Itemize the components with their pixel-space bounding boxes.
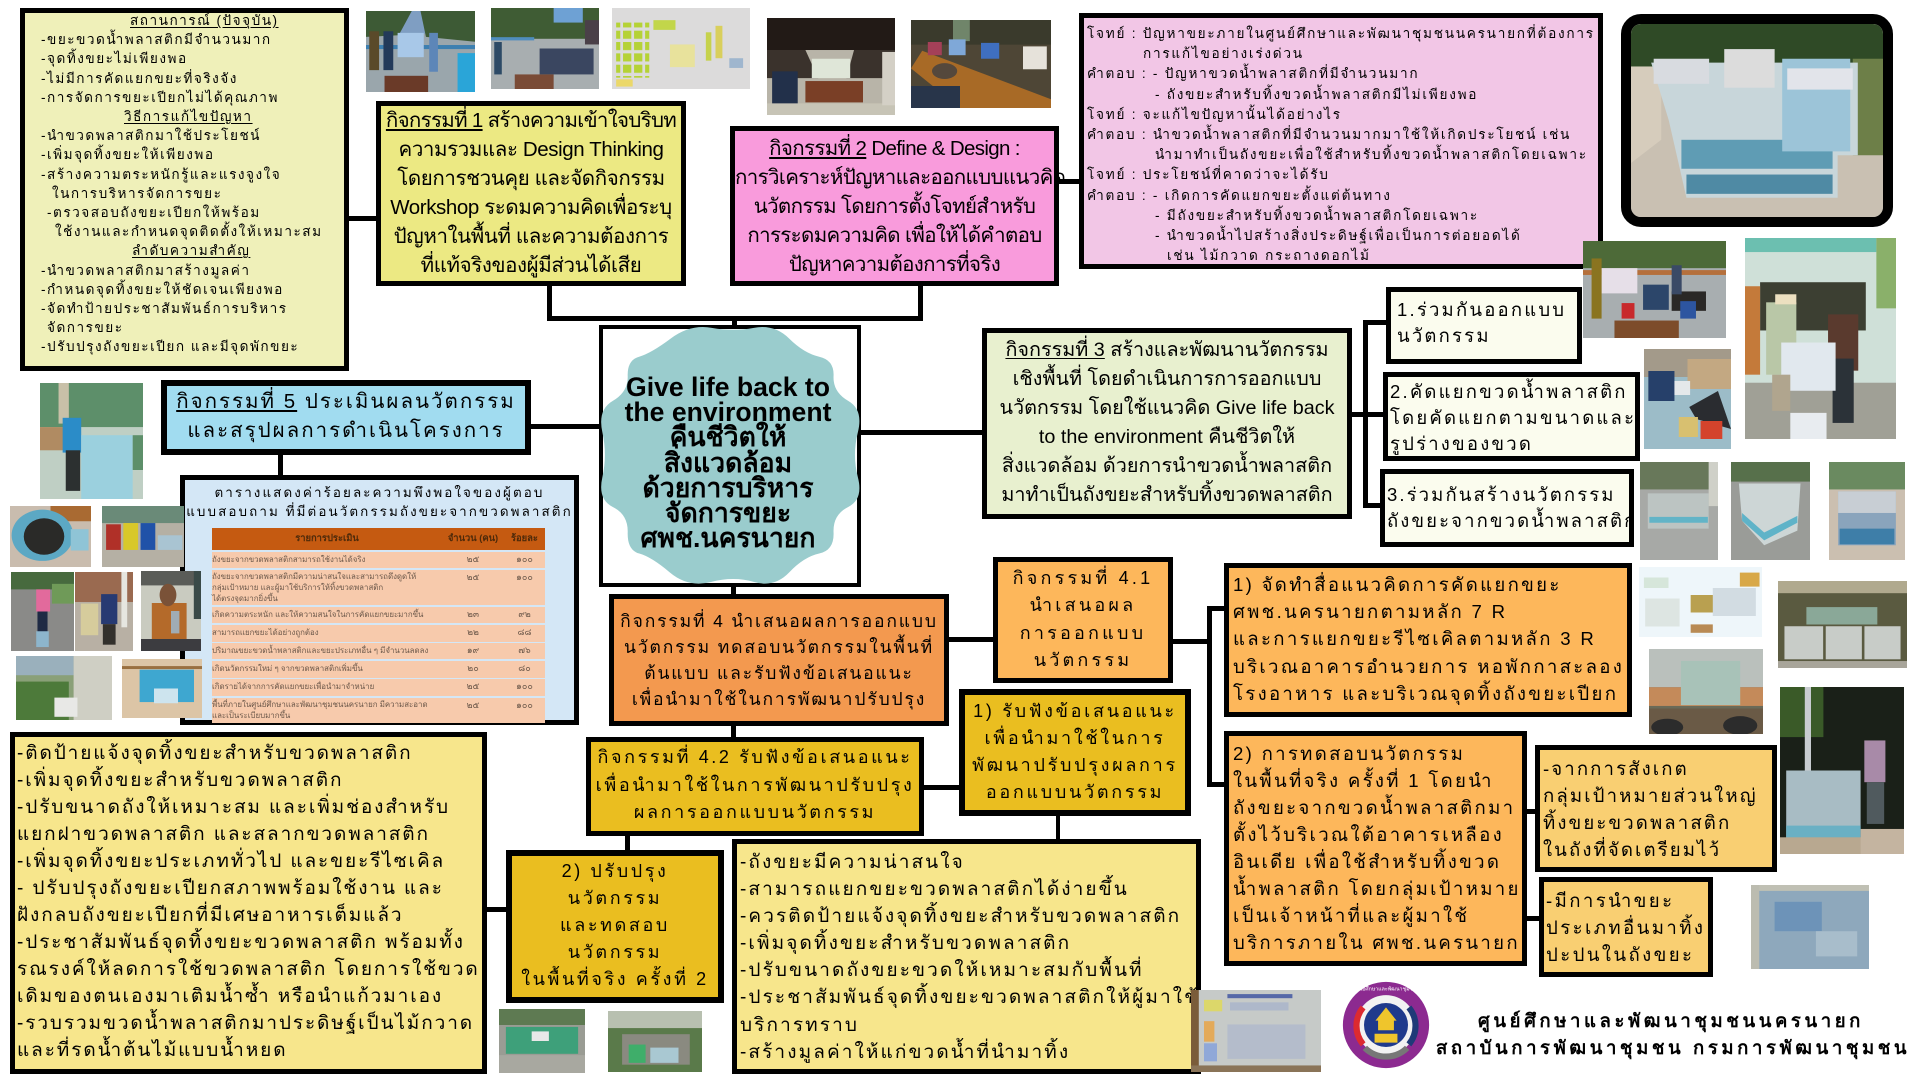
panel: situation, solutions and priorities: -ตรวจสอบถังขยะเปียกให้พร้อม xyxy=(47,205,261,220)
table row 4: ๒๒ xyxy=(467,627,479,637)
panel: listen to suggestions: เพื่อนำมาใช้ในการ xyxy=(984,728,1166,748)
panel: improve and test round 2: นวัตกรรม xyxy=(568,888,662,908)
panel: activity 2: ปัญหาความต้องการที่จริง xyxy=(789,253,1000,276)
panel: activity 3: to the environment คืนชีวิตให้ xyxy=(1039,426,1295,448)
table row 7: ๒๕ xyxy=(467,681,479,691)
footer: organisation name: ศูนย์ศึกษาและพัฒนาชุมชนนครนายก xyxy=(1478,1010,1864,1031)
step 1 of activity 3: 1.ร่วมกันออกแบบ xyxy=(1397,299,1566,320)
center title text: ด้วยการบริหาร xyxy=(642,473,814,503)
table row 3 xyxy=(212,607,545,623)
panel: improve and test round 2: ในพื้นที่จริง ครั้งที่ 2 xyxy=(521,969,709,989)
panel: activity 4 xyxy=(609,594,949,726)
photo: woman beside water dispenser xyxy=(75,572,133,651)
panel: 7R and 3R media: 1) จัดทำสื่อแนวคิดการคัดแยกขยะ xyxy=(1233,574,1562,595)
panel: situation, solutions and priorities: -ไม่มีการคัดแยกขยะที่จริงจัง xyxy=(41,71,238,86)
panel: improvements list: -ติดป้ายแจ้งจุดทิ้งขยะสำหรับขวดพลาสติก xyxy=(17,743,413,764)
panel: improve and test round 2 xyxy=(506,850,724,1003)
panel: design questions and answers: โจทย์ : ประโยชน์ที่คาดว่าจะได้รับ xyxy=(1087,167,1330,182)
table row 1: ๑๐๐ xyxy=(516,554,533,564)
panel: activity 2: นวัตกรรม โดยการตั้งโจทย์สำหรับ xyxy=(754,195,1035,218)
panel: observation 1: ทิ้งขยะขวดพลาสติก xyxy=(1543,812,1731,833)
panel: activity 3 xyxy=(982,328,1352,519)
panel: situation, solutions and priorities: สถานการณ์ (ปัจจุบัน) xyxy=(130,13,279,28)
photo: man with bottle bin xyxy=(40,383,143,499)
panel: satisfaction table xyxy=(180,475,579,725)
step 3 of activity 3 xyxy=(1380,469,1634,547)
step 2 of activity 3: รูปร่างของขวด xyxy=(1390,433,1533,454)
panel: improvements list: -เพิ่มจุดทิ้งขยะสำหรับขวดพลาสติก xyxy=(17,770,343,791)
panel: activity 4: เพื่อนำมาใช้ในการพัฒนาปรับปรุง xyxy=(632,689,926,709)
panel: improve and test round 2: นวัตกรรม xyxy=(568,942,662,962)
panel: design questions and answers: คำตอบ : - เกิดการคัดแยกขยะตั้งแต่ต้นทาง xyxy=(1087,188,1392,203)
table row 5: ๗๖ xyxy=(518,645,531,655)
panel: activity 3: มาทำเป็นถังขยะสำหรับทิ้งขวดพลาสติก xyxy=(1001,484,1333,506)
table row 2: ๑๐๐ xyxy=(516,572,533,582)
panel: design questions and answers: โจทย์ : จะแก้ไขปัญหานั้นได้อย่างไร xyxy=(1087,107,1342,122)
panel: situation, solutions and priorities: -กำหนดจุดทิ้งขยะให้ชัดเจนเพียงพอ xyxy=(41,282,284,297)
panel: situation, solutions and priorities xyxy=(20,8,349,371)
panel: improvements list: -ปรับขนาดถังให้เหมาะสม และเพิ่มช่องสำหรับ xyxy=(17,797,450,818)
photo: people around wooden table xyxy=(911,20,1051,108)
table row 8: ๑๐๐ xyxy=(516,700,533,710)
panel: activity 4: นวัตกรรม ทดสอบนวัตกรรมในพื้นที่ xyxy=(624,637,934,657)
panel: field test round 1: บริการภายใน ศพช.นครนายก xyxy=(1233,932,1520,953)
table row 6 xyxy=(212,661,545,678)
table row 7: เกิดรายได้จากการคัดแยกขยะเพื่อนำมาจำหน่าย xyxy=(212,682,374,691)
panel: activity 3: นวัตกรรม โดยใช้แนวคิด Give life back xyxy=(999,397,1335,419)
photo: bottle bin frame 1 xyxy=(1640,462,1718,560)
panel: situation, solutions and priorities: วิธีการแก้ไขปัญหา xyxy=(124,109,253,124)
panel: activity 4.1: การออกแบบ xyxy=(1020,623,1146,643)
panel: activity 4.1: กิจกรรมที่ 4.1 xyxy=(1013,568,1153,588)
photo: sticky notes on board xyxy=(612,8,750,89)
table row 5: ๑๙ xyxy=(467,645,479,655)
panel: situation, solutions and priorities: -นำขวดพลาสติกมาใช้ประโยชน์ xyxy=(41,128,261,143)
panel: 7R and 3R media: และการแยกขยะรีไซเคิลตามหลัก 3 R xyxy=(1233,628,1596,649)
panel: listen to suggestions: ออกแบบนวัตกรรม xyxy=(986,782,1164,802)
panel: design questions and answers: - ถังขยะสำหรับทิ้งขวดน้ำพลาสติกมีไม่เพียงพอ xyxy=(1155,87,1478,102)
panel: improvements list: - ปรับปรุงถังขยะเปียกสภาพพร้อมใช้งาน และ xyxy=(17,878,444,899)
panel: feedback list: -สามารถแยกขยะขวดพลาสติกได้ง่ายขึ้น xyxy=(740,879,1129,900)
panel: field test round 1: ตั้งไว้บริเวณใต้อาคารเหลือง xyxy=(1233,824,1504,845)
panel: activity 3: สิ่งแวดล้อม ด้วยการนำขวดน้ำพลาสติก xyxy=(1002,455,1332,477)
photo: infographic poster xyxy=(1639,567,1762,637)
panel: activity 4.1: นวัตกรรม xyxy=(1034,650,1132,670)
panel: design questions and answers: นำมาทำเป็นถังขยะเพื่อใช้สำหรับทิ้งขวดน้ำพลาสติกโดยเฉพาะ xyxy=(1155,147,1588,162)
step 2 of activity 3: โดยคัดแยกตามขนาดและ xyxy=(1390,407,1636,428)
panel: 7R and 3R media: โรงอาหาร และบริเวณจุดทิ้งถังขยะเปียก xyxy=(1233,683,1618,704)
table row 3: ๙๒ xyxy=(518,609,531,619)
step 1 of activity 3: นวัตกรรม xyxy=(1397,325,1491,346)
photo: presentation outdoors xyxy=(366,11,475,92)
table row 1: ถังขยะจากขวดพลาสติกสามารถใช้งานได้จริง xyxy=(212,555,365,564)
photo: bottle planter xyxy=(10,506,91,567)
panel: improvements list: ฝังกลบถังขยะเปียกที่มีเศษอาหารเต็มแล้ว xyxy=(17,905,403,926)
table row 8 xyxy=(212,698,545,723)
logo: community development center seal: ศูนย์ศึกษาและพัฒนาชุมชน xyxy=(1355,986,1417,993)
panel: 7R and 3R media xyxy=(1224,563,1632,717)
panel: design questions and answers: คำตอบ : นำขวดน้ำพลาสติกที่มีจำนวนมากมาใช้ให้เกิดประโยชน์ เช่น xyxy=(1087,127,1571,142)
panel: feedback list xyxy=(732,839,1201,1074)
table row 8: และเป็นระเบียบมากขึ้น xyxy=(212,711,290,720)
panel: observation 2: -มีการนำขยะ xyxy=(1546,890,1674,911)
panel: situation, solutions and priorities: จัดการขยะ xyxy=(47,320,124,335)
panel: listen to suggestions: พัฒนาปรับปรุงผลการ xyxy=(972,755,1178,775)
panel: feedback list: -ประชาสัมพันธ์จุดทิ้งขยะขวดพลาสติกให้ผู้มาใช้ xyxy=(740,987,1199,1008)
photo: coloured waste bins xyxy=(102,506,184,567)
panel: activity 1: ปัญหาในพื้นที่ และความต้องการ xyxy=(394,225,668,248)
table row 2: ได้ตรงจุดมากยิ่งขึ้น xyxy=(212,594,278,603)
table row 8: พื้นที่ภายในศูนย์ศึกษาและพัฒนาชุมชนนครนายก มีความสะอาด xyxy=(212,700,428,709)
panel: improvements list: -เพิ่มจุดทิ้งขยะประเภททั่วไป และขยะรีไซเคิล xyxy=(17,851,445,872)
step 3 of activity 3: ถังขยะจากขวดน้ำพลาสติก xyxy=(1387,510,1637,531)
step 2 of activity 3: 2.คัดแยกขวดน้ำพลาสติก xyxy=(1390,381,1628,402)
center title text: Give life back to xyxy=(626,372,830,402)
table header xyxy=(212,528,545,550)
step 1 of activity 3 xyxy=(1386,287,1582,364)
panel: observation 1: -จากการสังเกต xyxy=(1543,758,1689,779)
photo: notice board shelter xyxy=(1778,581,1907,668)
table row 1: ๒๕ xyxy=(467,554,479,564)
photo: man with bin at night xyxy=(1780,687,1904,854)
center scalloped shape xyxy=(601,327,860,584)
photo: feedback chart paper xyxy=(1191,990,1321,1072)
table row 8: ๒๕ xyxy=(467,700,479,710)
photo: green bin outdoors xyxy=(499,1009,585,1073)
panel: improve and test round 2: และทดสอบ xyxy=(560,915,670,935)
table row 5: ปริมาณขยะขวดน้ำพลาสติกและขยะประเภทอื่น ๆ มีจำนวนลดลง xyxy=(212,646,428,655)
table row 3: เกิดความตระหนัก และให้ความสนใจในการคัดแยกขยะมากขึ้น xyxy=(212,610,423,619)
table row 6: เกิดนวัตกรรมใหม่ ๆ จากขวดพลาสติกเพิ่มขึ้น xyxy=(212,664,363,673)
panel: situation, solutions and priorities: ลำดับความสำคัญ xyxy=(132,243,250,258)
panel: activity 1 xyxy=(376,101,686,286)
center title text xyxy=(624,372,832,553)
table row 2 xyxy=(212,570,545,605)
center title text: ศพช.นครนายก xyxy=(641,523,815,553)
panel: field test round 1: เป็นเจ้าหน้าที่และผู้มาใช้ xyxy=(1233,905,1469,926)
panel: feedback list: บริการทราบ xyxy=(740,1015,859,1036)
panel: listen to suggestions: 1) รับฟังข้อเสนอแนะ xyxy=(973,701,1177,721)
panel: feedback list: -สร้างมูลค่าให้แก่ขวดน้ำที่นำมาทิ้ง xyxy=(740,1042,1070,1063)
table header: รายการประเมิน xyxy=(295,532,359,543)
panel: activity 4.1: นำเสนอผล xyxy=(1030,595,1136,615)
panel: 7R and 3R media: ศพช.นครนายกตามหลัก 7 R xyxy=(1233,601,1507,622)
panel: activity 1: ที่แท้จริงของผู้มีส่วนได้เสีย xyxy=(421,254,641,277)
table row 7: ๑๐๐ xyxy=(516,681,533,691)
photo: woman with bottle broom xyxy=(11,572,74,651)
panel: feedback list: -เพิ่มจุดทิ้งขยะสำหรับขวดพลาสติก xyxy=(740,933,1071,954)
panel: improvements list: เดิมของตนเองมาเติมน้ำซ้ำ หรือนำแก้วมาเอง xyxy=(17,986,443,1007)
panel: design questions and answers: คำตอบ : - ปัญหาขวดน้ำพลาสติกที่มีจำนวนมาก xyxy=(1087,66,1419,81)
panel: activity 5: กิจกรรมที่ 5 ประเมินผลนวัตกรรม xyxy=(176,390,516,413)
panel: situation, solutions and priorities: -จัดทำป้ายประชาสัมพันธ์การบริหาร xyxy=(41,301,288,316)
center title text: the environment xyxy=(625,397,831,427)
panel: design questions and answers xyxy=(1079,13,1603,269)
footer: organisation name xyxy=(1436,1010,1910,1060)
panel: improvements list: แยกฝาขวดพลาสติก และสลากขวดพลาสติก xyxy=(17,824,430,845)
table row 4 xyxy=(212,625,545,642)
table title: แบบสอบถาม ที่มีต่อนวัตกรรมถังขยะจากขวดพลาสติก xyxy=(186,504,573,518)
photo: plastic bottle bin in black rounded frame xyxy=(1621,14,1893,227)
photo: poster on bottles xyxy=(122,659,202,718)
photo: bottle bin with green surroundings xyxy=(608,1011,702,1072)
panel: improvements list: และที่รดน้ำต้นไม้แบบน้ำหยด xyxy=(17,1040,287,1061)
panel: situation, solutions and priorities: -ปรับปรุงถังขยะเปียก และมีจุดพักขยะ xyxy=(41,339,299,354)
table row 1 xyxy=(212,552,545,568)
panel: activity 5: และสรุปผลการดำเนินโครงการ xyxy=(187,418,505,442)
photo: bottles in bin xyxy=(1751,885,1869,969)
panel: activity 3: กิจกรรมที่ 3 สร้างและพัฒนานวัตกรรม xyxy=(1005,339,1329,361)
panel: improvements list: -ประชาสัมพันธ์จุดทิ้งขยะขวดพลาสติก พร้อมทั้ง xyxy=(17,932,465,953)
panel: observation 2: ประเภทอื่นมาทิ้ง xyxy=(1546,917,1705,938)
panel: activity 1: โดยการชวนคุย และจัดกิจกรรม xyxy=(397,167,665,190)
panel: design questions and answers: - มีถังขยะสำหรับทิ้งขวดน้ำพลาสติกโดยเฉพาะ xyxy=(1155,208,1479,223)
photo: man holding bottle xyxy=(141,571,201,651)
panel: field test round 1: น้ำพลาสติก โดยกลุ่มเป้าหมาย xyxy=(1233,878,1521,899)
table row 4: ๘๘ xyxy=(518,627,531,637)
panel: field test round 1: 2) การทดสอบนวัตกรรม xyxy=(1233,743,1465,764)
panel: activity 4: ต้นแบบ และรับฟังข้อเสนอแนะ xyxy=(644,663,914,683)
panel: situation, solutions and priorities: -นำขวดพลาสติกมาสร้างมูลค่า xyxy=(41,263,250,278)
table row 3: ๒๓ xyxy=(467,609,479,619)
photo: group seated outdoors xyxy=(491,8,599,89)
panel: activity 2 xyxy=(730,126,1059,286)
panel: situation, solutions and priorities: -เพิ่มจุดทิ้งขยะให้เพียงพอ xyxy=(41,147,214,162)
panel: activity 4.2: กิจกรรมที่ 4.2 รับฟังข้อเสนอแนะ xyxy=(597,747,912,767)
panel: improve and test round 2: 2) ปรับปรุง xyxy=(562,861,668,881)
photo: sorting bottles xyxy=(1644,349,1731,449)
panel: feedback list: -ควรติดป้ายแจ้งจุดทิ้งขยะสำหรับขวดพลาสติก xyxy=(740,906,1181,927)
table title xyxy=(186,485,573,518)
panel: activity 4.1 xyxy=(993,557,1173,683)
photo: meeting under building xyxy=(767,18,895,115)
panel: observation 1: ในถังที่จัดเตรียมไว้ xyxy=(1543,839,1721,860)
table row 4: สามารถแยกขยะได้อย่างถูกต้อง xyxy=(212,628,319,637)
panel: field test round 1: อินเดีย เพื่อใช้สำหรับทิ้งขวด xyxy=(1233,851,1501,872)
panel: observation 1: กลุ่มเป้าหมายส่วนใหญ่ xyxy=(1543,785,1758,806)
table row 2: ๒๕ xyxy=(467,572,479,582)
panel: feedback list: -ถังขยะมีความน่าสนใจ xyxy=(740,852,965,873)
panel: situation, solutions and priorities: -สร้างความตระหนักรู้และแรงจูงใจ xyxy=(41,167,281,182)
step 3 of activity 3: 3.ร่วมกันสร้างนวัตกรรม xyxy=(1387,484,1616,505)
panel: situation, solutions and priorities: -ขยะขวดน้ำพลาสติกมีจำนวนมาก xyxy=(41,32,272,47)
table header: ร้อยละ xyxy=(511,532,538,543)
photo: bottle bin frame 2 xyxy=(1731,462,1810,560)
panel: activity 2: กิจกรรมที่ 2 Define & Design : xyxy=(769,137,1020,160)
panel: design questions and answers: เช่น ไม้กวาด กระถางดอกไม้ xyxy=(1167,248,1371,263)
table row 7 xyxy=(212,679,545,696)
table row 2: กลุ่มเป้าหมาย และผู้มาใช้บริการให้ทิ้งขวดพลาสติก xyxy=(212,583,383,592)
table title: ตารางแสดงค่าร้อยละความพึงพอใจของผู้ตอบ xyxy=(214,485,545,500)
center title text: จัดการขยะ xyxy=(665,498,791,528)
center panel: project title xyxy=(599,325,861,587)
table row 2: ถังขยะจากขวดพลาสติกมีความน่าสนใจและสามารถดึงดูดให้ xyxy=(212,572,416,581)
panel: activity 1: ความรวมและ Design Thinking xyxy=(398,138,664,161)
footer: organisation name: สถาบันการพัฒนาชุมชน กรมการพัฒนาชุมชน xyxy=(1436,1037,1910,1058)
panel: design questions and answers: การแก้ไขอย่างเร่งด่วน xyxy=(1143,46,1304,61)
panel: improvements list xyxy=(10,732,487,1074)
photo: bottle bin frame 3 xyxy=(1829,462,1905,560)
panel: activity 1: Workshop ระดมความคิดเพื่อระบุ xyxy=(390,196,672,219)
center title text: คืนชีวิตให้ xyxy=(670,422,786,452)
panel: 7R and 3R media: บริเวณอาคารอำนวยการ หอพักกาสะลอง xyxy=(1233,656,1624,677)
table row 6: ๘๐ xyxy=(518,663,531,673)
panel: situation, solutions and priorities: ใช้งานและกำหนดจุดติดตั้งให้เหมาะสม xyxy=(55,224,323,239)
panel: design questions and answers: โจทย์ : ปัญหาขยะภายในศูนย์ศึกษาและพัฒนาชุมชนนครนายกที่ต้องการ xyxy=(1087,26,1595,41)
panel: activity 5 xyxy=(161,380,531,455)
panel: observation 1 xyxy=(1535,745,1777,872)
panel: activity 4.2 xyxy=(586,737,924,836)
panel: situation, solutions and priorities: -การจัดการขยะเปียกไม่ได้คุณภาพ xyxy=(41,90,279,105)
table row 6: ๒๐ xyxy=(467,663,479,673)
logo: community development center seal xyxy=(1342,982,1430,1068)
panel: activity 1: กิจกรรมที่ 1 สร้างความเข้าใจบริบท xyxy=(386,109,676,132)
panel: field test round 1: ถังขยะจากขวดน้ำพลาสติกมา xyxy=(1233,797,1515,818)
table row 5 xyxy=(212,643,545,659)
panel: situation, solutions and priorities: -จุดทิ้งขยะไม่เพียงพอ xyxy=(41,51,188,66)
panel: improvements list: -รวบรวมขวดน้ำพลาสติกมาประดิษฐ์เป็นไม้กวาด xyxy=(17,1013,474,1034)
panel: activity 2: การระดมความคิด เพื่อให้ได้คำตอบ xyxy=(747,224,1042,247)
panel: observation 2 xyxy=(1539,877,1713,977)
panel: activity 4.2: เพื่อนำมาใช้ในการพัฒนาปรับปรุง xyxy=(596,774,914,794)
photo: sign with wet bins xyxy=(1649,649,1763,734)
panel: field test round 1 xyxy=(1224,731,1527,966)
center title text: สิ่งแวดล้อม xyxy=(664,448,792,478)
panel: activity 4.2: ผลการออกแบบนวัตกรรม xyxy=(634,802,876,822)
photo: team designing innovation xyxy=(1583,241,1726,338)
panel: field test round 1: ในพื้นที่จริง ครั้งที่ 1 โดยนำ xyxy=(1233,770,1494,791)
table header: จำนวน (คน) xyxy=(448,532,498,543)
photo: planter from bottle xyxy=(16,656,112,720)
panel: feedback list: -ปรับขนาดถังขยะขวดให้เหมาะสมกับพื้นที่ xyxy=(740,960,1144,981)
panel: observation 2: ปะปนในถังขยะ xyxy=(1546,944,1694,965)
panel: activity 2: การวิเคราะห์ปัญหาและออกแบบแนวคิด xyxy=(735,166,1065,189)
panel: situation, solutions and priorities: ในการบริหารจัดการขยะ xyxy=(52,186,222,201)
panel: activity 4: กิจกรรมที่ 4 นำเสนอผลการออกแบบ xyxy=(620,611,938,631)
step 2 of activity 3 xyxy=(1383,372,1640,461)
panel: design questions and answers: - นำขวดน้ำไปสร้างสิ่งประดิษฐ์เพื่อเป็นการต่อยอดได้ xyxy=(1155,228,1522,243)
photo: two men with collected bottles xyxy=(1745,238,1896,439)
panel: activity 3: เชิงพื้นที่ โดยดำเนินการการออกแบบ xyxy=(1013,368,1321,390)
panel: listen to suggestions xyxy=(959,689,1191,816)
panel: improvements list: รณรงค์ให้ลดการใช้ขวดพลาสติก โดยการใช้ขวด xyxy=(17,959,480,980)
